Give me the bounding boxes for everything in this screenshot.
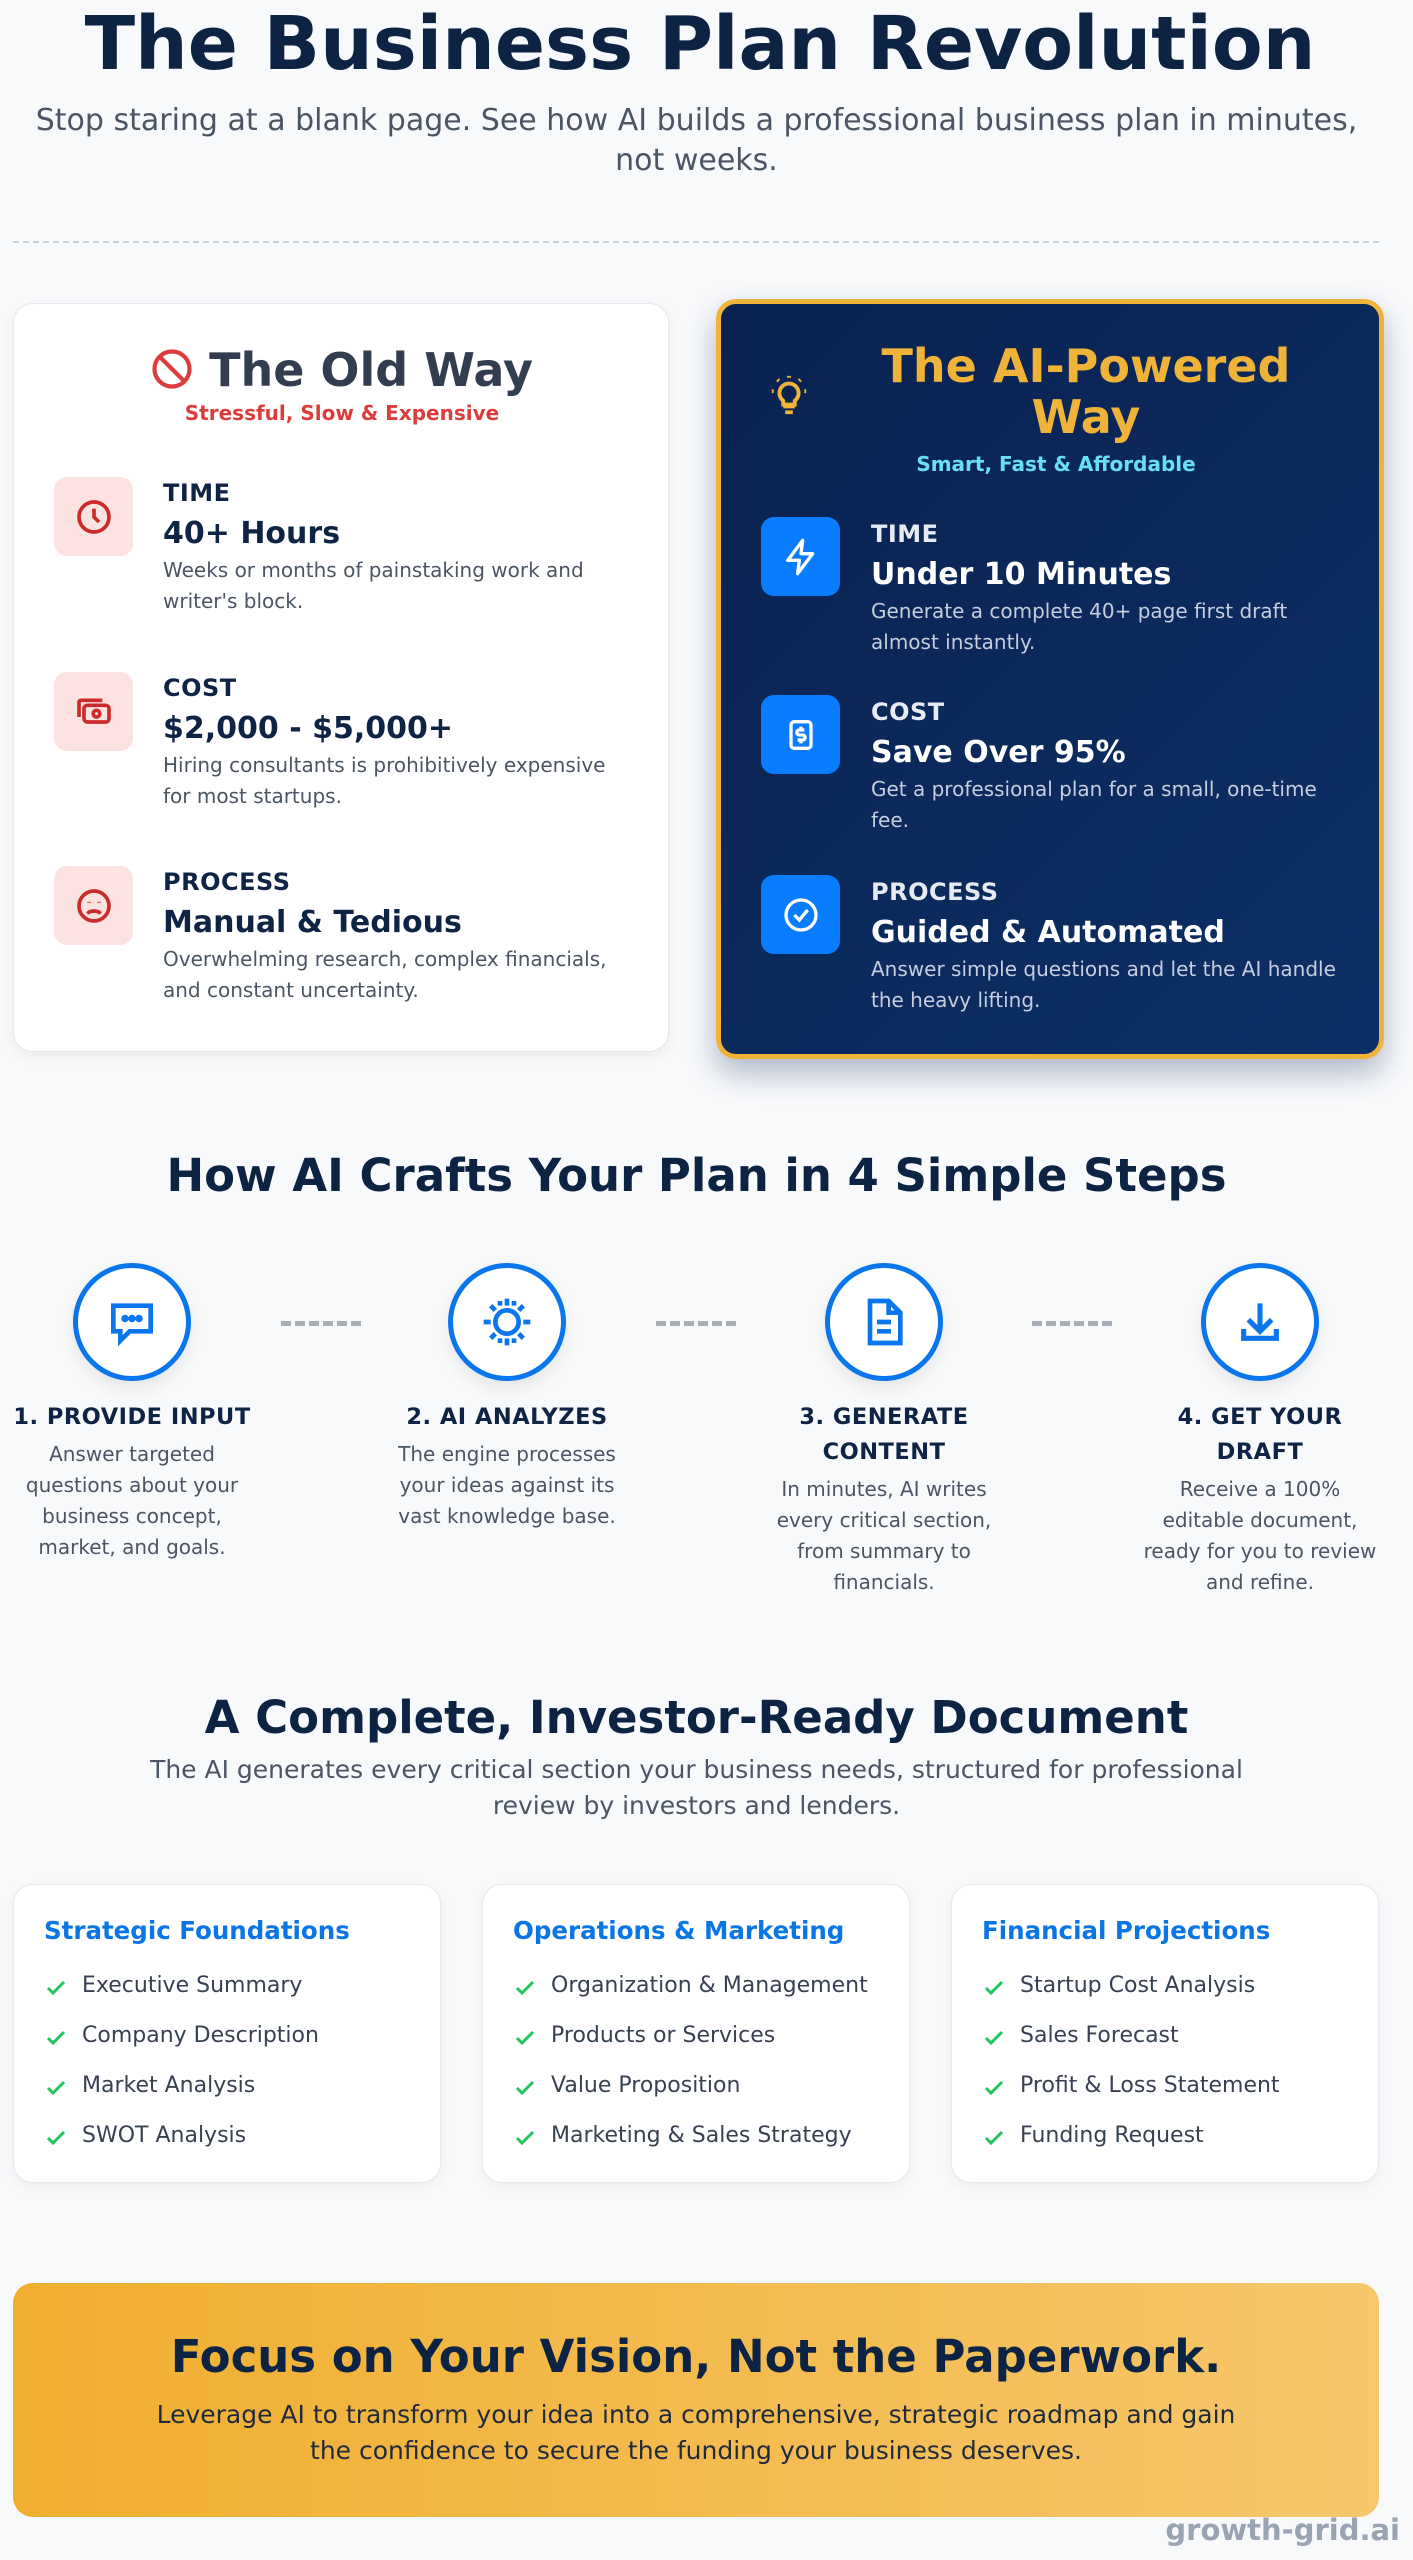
icon: frown [54,866,133,945]
heading: steps: How AI Crafts Your Plan in 4 Simple Steps [166,1149,1226,1202]
step 3 [777,1404,991,1594]
row: cost [54,672,605,808]
step 4: 4. GET YOUR [1178,1404,1342,1430]
icon: dollar doc [761,695,840,774]
icon: lightning [761,517,840,596]
row: process: and constant uncertainty. [163,978,419,1002]
row: time: Generate a complete 40+ page first draft [871,599,1287,623]
row: cost: COST [871,698,945,726]
step 1: business concept, [42,1504,222,1528]
row: cost [761,695,1317,832]
card: strategic: Market Analysis [82,2073,255,2098]
icon: money [54,672,133,751]
row: time: TIME [163,479,231,507]
heading: ai way [882,339,1290,444]
card: financial: Funding Request [1020,2123,1204,2148]
subtitle [36,103,1357,178]
step 4: and refine. [1206,1570,1314,1594]
card: operations: Marketing & Sales Strategy [551,2123,852,2148]
row: process [761,875,1336,1012]
card: financial: Startup Cost Analysis [1020,1973,1255,1998]
card: strategic: SWOT Analysis [82,2123,246,2148]
arrow 1 [281,1321,361,1326]
row: process: PROCESS [163,868,290,896]
subtitle: Stop staring at a blank page. See how AI builds a professional business plan in minutes, [36,103,1357,138]
icon: chip [448,1263,566,1381]
step 2: The engine processes [398,1442,616,1466]
row: cost: Get a professional plan for a small, one-time [871,777,1317,801]
title: The Business Plan Revolution [85,1,1315,87]
step 1: questions about your [26,1473,238,1497]
card: financial [951,1884,1379,2183]
step 4: Receive a 100% [1180,1477,1340,1501]
row: time: Weeks or months of painstaking work and [163,558,584,582]
subtitle: document: The AI generates every critical section your business needs, structured for professional [150,1755,1243,1784]
card: strategic: Company Description [82,2023,319,2048]
step 4: DRAFT [1217,1439,1303,1465]
banner text: the confidence to secure the funding your business deserves. [310,2436,1082,2465]
subtitle: document [150,1755,1243,1820]
card: strategic: Strategic Foundations [44,1916,350,1945]
heading: ai way: Way [1032,390,1140,444]
subheading: ai way: Smart, Fast & Affordable [916,452,1196,476]
arrow 3 [1032,1321,1112,1326]
heading: old way: The Old Way [209,343,533,397]
step 3: financials. [833,1570,935,1594]
row: time: TIME [871,520,939,548]
card: operations: Organization & Management [551,1973,868,1998]
card: operations: Operations & Marketing [513,1916,844,1945]
step 3: In minutes, AI writes [781,1477,987,1501]
row: process: Overwhelming research, complex financials, [163,947,606,971]
row: cost: COST [163,674,237,702]
panel: old way [13,303,669,1052]
icon: download [1201,1263,1319,1381]
row: cost: Hiring consultants is prohibitively expensive [163,753,605,777]
card: strategic: Executive Summary [82,1973,302,1998]
row: time [761,517,1287,654]
arrow 2 [656,1321,736,1326]
icon: document [825,1263,943,1381]
banner text [157,2400,1235,2465]
card: financial: Profit & Loss Statement [1020,2073,1280,2098]
icon: chat [73,1263,191,1381]
row: process [54,866,606,1002]
step 2 [398,1404,616,1528]
row: cost: for most startups. [163,784,342,808]
panel: ai way [716,299,1384,1059]
icon: bulb [772,376,806,414]
step 1: market, and goals. [38,1535,226,1559]
step 4: editable document, [1163,1508,1357,1532]
banner text: Leverage AI to transform your idea into a comprehensive, strategic roadmap and gain [157,2400,1235,2429]
step 1: Answer targeted [49,1442,215,1466]
card: operations: Value Proposition [551,2073,740,2098]
step 3: 3. GENERATE [799,1404,969,1430]
step 3: from summary to [797,1539,971,1563]
icon: check circle [761,875,840,954]
banner heading: Focus on Your Vision, Not the Paperwork. [171,2330,1221,2383]
card: strategic [13,1884,441,2183]
step 2: 2. AI ANALYZES [406,1404,608,1430]
icon: clock [54,477,133,556]
card: operations [482,1884,910,2183]
steps [13,1263,1376,1594]
card: operations: Products or Services [551,2023,775,2048]
step 4: ready for you to review [1144,1539,1376,1563]
row: cost: fee. [871,808,909,832]
row: time: Under 10 Minutes [871,557,1171,592]
row: time [54,477,584,613]
row: process: PROCESS [871,878,998,906]
subtitle: document: review by investors and lenders. [493,1791,900,1820]
step 3: CONTENT [823,1439,945,1465]
subtitle: not weeks. [615,143,778,178]
row: time: writer's block. [163,589,303,613]
step 3: every critical section, [777,1508,991,1532]
row: cost: Save Over 95% [871,735,1126,770]
subheading: old way: Stressful, Slow & Expensive [185,401,499,425]
row: process: the heavy lifting. [871,988,1040,1012]
step 1: 1. PROVIDE INPUT [13,1404,251,1430]
heading: ai way: The AI-Powered [882,339,1290,393]
row: cost: $2,000 - $5,000+ [163,711,453,746]
row: time: 40+ Hours [163,516,340,551]
card: financial: Financial Projections [982,1916,1270,1945]
step 4 [1144,1404,1376,1594]
heading: document: A Complete, Investor-Ready Document [205,1691,1188,1744]
row: process: Guided & Automated [871,915,1225,950]
row: process: Answer simple questions and let the AI handle [871,957,1336,981]
card: financial: Sales Forecast [1020,2023,1179,2048]
step 1 [13,1404,251,1559]
row: time: almost instantly. [871,630,1035,654]
footer brand: growth-grid.ai [1165,2513,1400,2547]
banner: call to action [13,2283,1379,2517]
row: process: Manual & Tedious [163,905,462,940]
step 2: your ideas against its [400,1473,614,1497]
step 2: vast knowledge base. [398,1504,616,1528]
